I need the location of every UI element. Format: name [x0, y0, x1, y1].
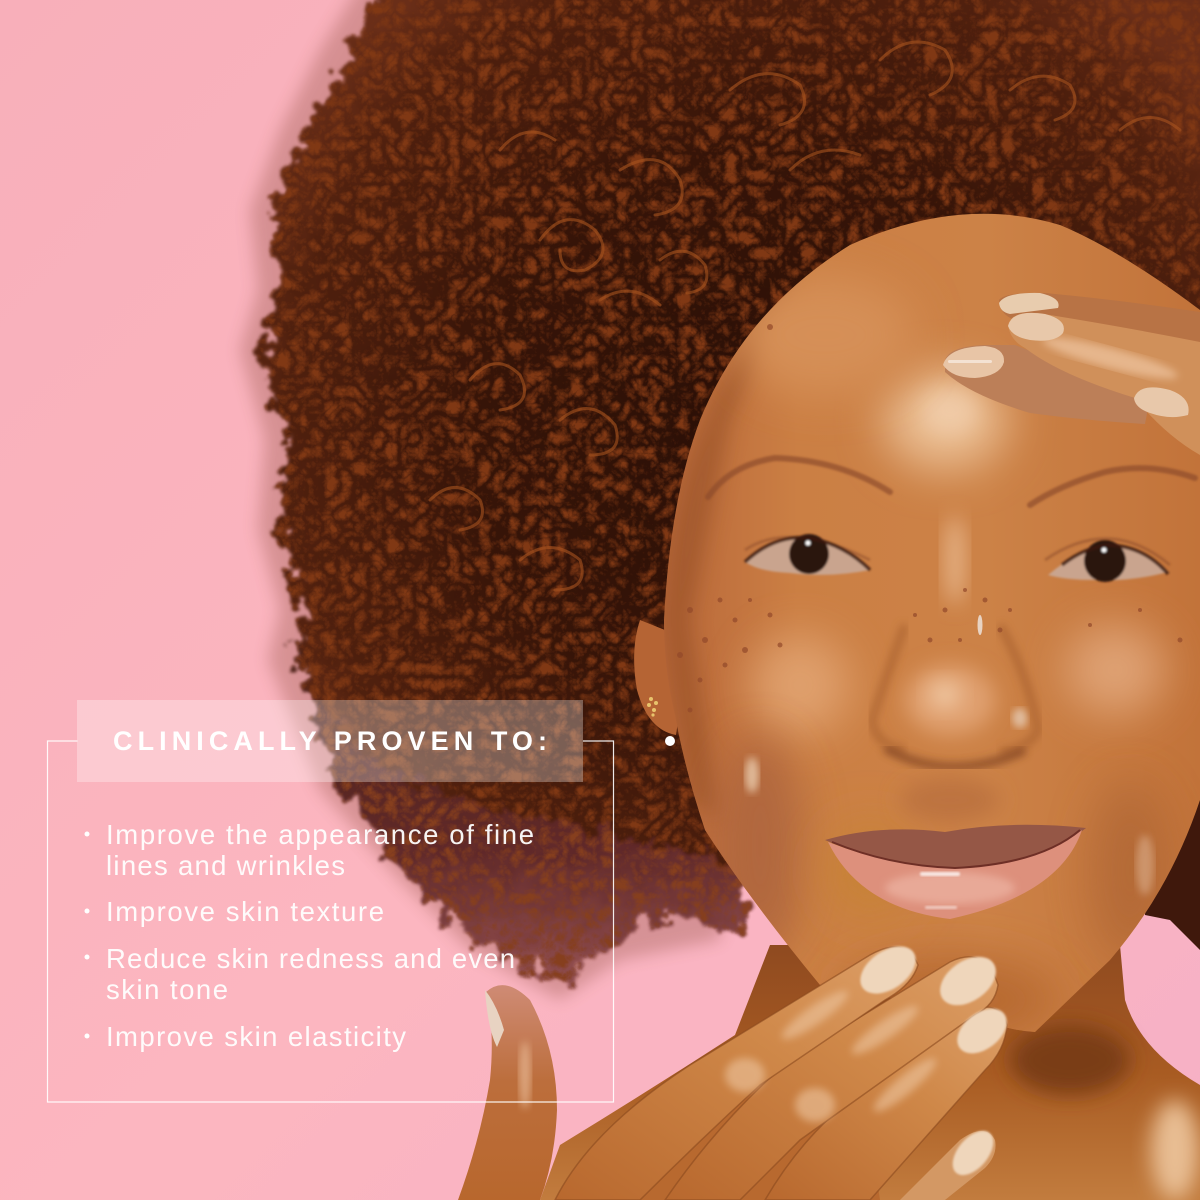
- heading: CLINICALLY PROVEN TO:: [113, 726, 547, 756]
- face shading and highlights: [664, 270, 1170, 1045]
- callout frame: [48, 741, 614, 1102]
- nose: [872, 625, 1038, 822]
- benefits list: [84, 819, 534, 1052]
- bullet 3: Reduce skin redness and even: [106, 943, 515, 974]
- thumb: [458, 985, 557, 1200]
- hair lower left fringe: [290, 640, 760, 985]
- forehead hand fingers: [943, 293, 1200, 455]
- face: [664, 214, 1200, 1032]
- thumb nail: [485, 990, 504, 1047]
- finger nails: [852, 937, 1015, 1183]
- portrait photo illustration: [240, 0, 1200, 1200]
- hair right side: [1145, 760, 1200, 950]
- bullet 2: Improve skin texture: [106, 896, 384, 927]
- index finger: [555, 947, 918, 1200]
- right eyebrow: [1030, 468, 1195, 505]
- left eye: [745, 534, 870, 575]
- heading band: [77, 700, 583, 782]
- freckles: [677, 324, 1182, 712]
- finger highlights: [725, 985, 941, 1122]
- bullet 3: skin tone: [106, 974, 228, 1005]
- ear with earring: [634, 620, 690, 735]
- chin hand: [458, 937, 1015, 1200]
- bullet 1: Improve the appearance of fine: [106, 819, 534, 850]
- lips: [825, 825, 1086, 919]
- left eyebrow: [708, 458, 890, 497]
- bullet 1: lines and wrinkles: [106, 850, 345, 881]
- bullet 1: [84, 819, 534, 881]
- under-chin shadow: [1010, 1025, 1130, 1095]
- bullet 4: Improve skin elasticity: [106, 1021, 406, 1052]
- thumb highlight: [519, 1041, 531, 1109]
- marker dot: [665, 736, 675, 746]
- hair main mass: [260, 0, 1200, 860]
- hair curls: [430, 42, 1180, 590]
- middle finger: [665, 957, 998, 1200]
- right eye: [1045, 539, 1170, 582]
- bullet 3: [84, 943, 515, 1005]
- chest highlight: [1151, 1100, 1199, 1200]
- neck and shoulders: [540, 945, 1200, 1200]
- pinky finger: [900, 1131, 996, 1200]
- hair wispy halo: [240, 0, 1200, 1000]
- ring finger: [765, 1007, 1007, 1200]
